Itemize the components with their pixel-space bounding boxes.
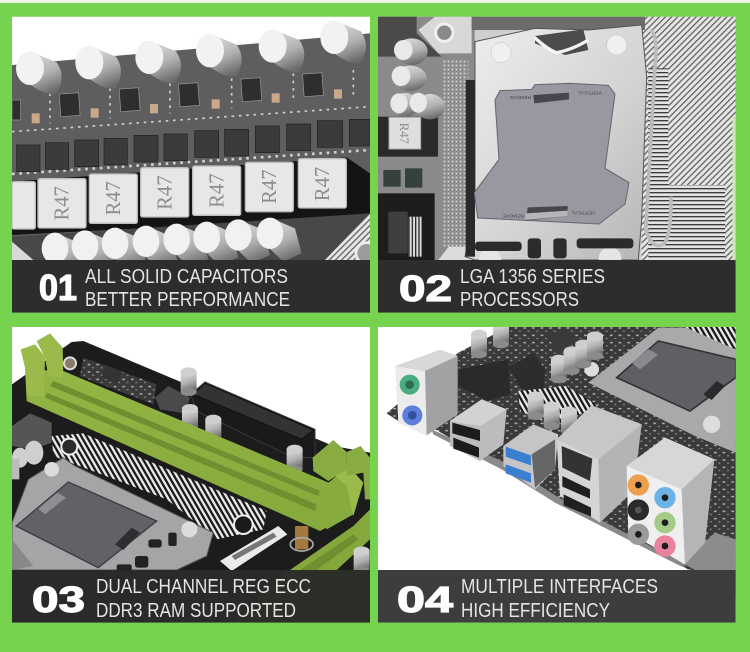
number 02: 02 [399, 268, 452, 309]
text: better performance: BETTER PERFORMANCE [85, 289, 290, 311]
left board [378, 17, 475, 260]
DIMM latches [21, 344, 45, 396]
hatch traces [52, 433, 267, 539]
upper board details [12, 73, 323, 120]
number 01: 01 [39, 267, 77, 308]
inductor markings: R47 [206, 173, 228, 208]
SATA ports [313, 440, 370, 499]
MOSFET row [17, 119, 370, 172]
inductor markings: R47 [103, 181, 125, 216]
cover engravings: REMOVE [502, 213, 524, 219]
caption bar [12, 570, 370, 623]
inductor markings: R47 [154, 175, 176, 210]
board top details [64, 357, 157, 404]
caption 02 [399, 266, 605, 311]
standoff [295, 526, 308, 549]
panel: LGA socket [378, 17, 736, 313]
panel: interfaces [378, 320, 736, 623]
RLC strip [442, 60, 468, 247]
inductor markings: R47 [52, 186, 74, 221]
inductor marking: R47 [397, 123, 411, 144]
text: high efficiency: HIGH EFFICIENCY [461, 600, 610, 622]
audio block [627, 438, 714, 564]
board front edge [432, 429, 685, 567]
USB stack [450, 399, 507, 461]
PCIe slot [290, 509, 370, 570]
vertical capacitors [181, 367, 303, 473]
panel: solid capacitors [12, 17, 377, 313]
text: lga 1356 series: LGA 1356 SERIES [460, 266, 605, 288]
caption 04 [397, 576, 658, 622]
socket frame [465, 25, 647, 260]
text: all solid capacitors: ALL SOLID CAPACITORS [85, 266, 288, 288]
caption bar board ghost [12, 260, 370, 313]
number 04: 04 [397, 579, 453, 620]
socket capacitors [392, 38, 445, 119]
socket screws [44, 462, 59, 477]
lower board [12, 213, 370, 313]
inductors [12, 159, 346, 229]
right traces [642, 17, 736, 260]
number 03: 03 [32, 579, 85, 620]
circuit board [12, 33, 370, 237]
CPU cover [16, 482, 157, 568]
board [12, 341, 370, 623]
lower socket cutouts [475, 238, 633, 258]
LAN stack [557, 405, 642, 523]
PS/2 ports [400, 375, 420, 395]
capacitor bottom row [42, 218, 302, 260]
CPU socket frame [12, 458, 213, 570]
USB3 stack [503, 424, 558, 489]
PCIe capacitor [354, 546, 370, 575]
sticker [220, 526, 287, 571]
PS/2 block [396, 350, 458, 435]
text: processors: PROCESSORS [460, 289, 579, 311]
cover engravings [502, 90, 602, 219]
chips [383, 168, 422, 188]
screws [491, 43, 511, 63]
dark inductor base [12, 157, 370, 235]
text: dual channel reg ecc: DUAL CHANNEL REG ECC [96, 576, 311, 598]
caption 03 [32, 576, 311, 622]
panel: dual channel RAM [12, 327, 370, 623]
CPU cover [474, 83, 629, 224]
inductor markings: R47 [312, 167, 334, 201]
ATX power connector [191, 382, 315, 458]
CPU socket [588, 328, 736, 453]
inductor [389, 117, 421, 149]
caption 01 [39, 266, 290, 311]
top capacitors [16, 21, 366, 94]
top strip [472, 17, 645, 30]
caption bar [378, 570, 736, 623]
text: multiple interfaces: MULTIPLE INTERFACES [461, 576, 658, 598]
board [387, 327, 736, 596]
inductor markings: R47 [259, 169, 281, 204]
caption bar [378, 260, 736, 313]
cover engravings: VERTICAL [571, 209, 595, 215]
small SMD components [32, 89, 342, 123]
cover engravings: VERTICAL [577, 90, 602, 96]
inductor markings [52, 167, 334, 221]
retention lever [646, 30, 671, 246]
text: ddr3 ram supported: DDR3 RAM SUPPORTED [96, 600, 296, 622]
cover engravings: REMOVE [509, 94, 531, 100]
left power area [12, 413, 52, 449]
choke [155, 386, 190, 413]
components [508, 353, 545, 393]
audio jacks [631, 478, 672, 553]
DIMM slots [25, 369, 353, 531]
